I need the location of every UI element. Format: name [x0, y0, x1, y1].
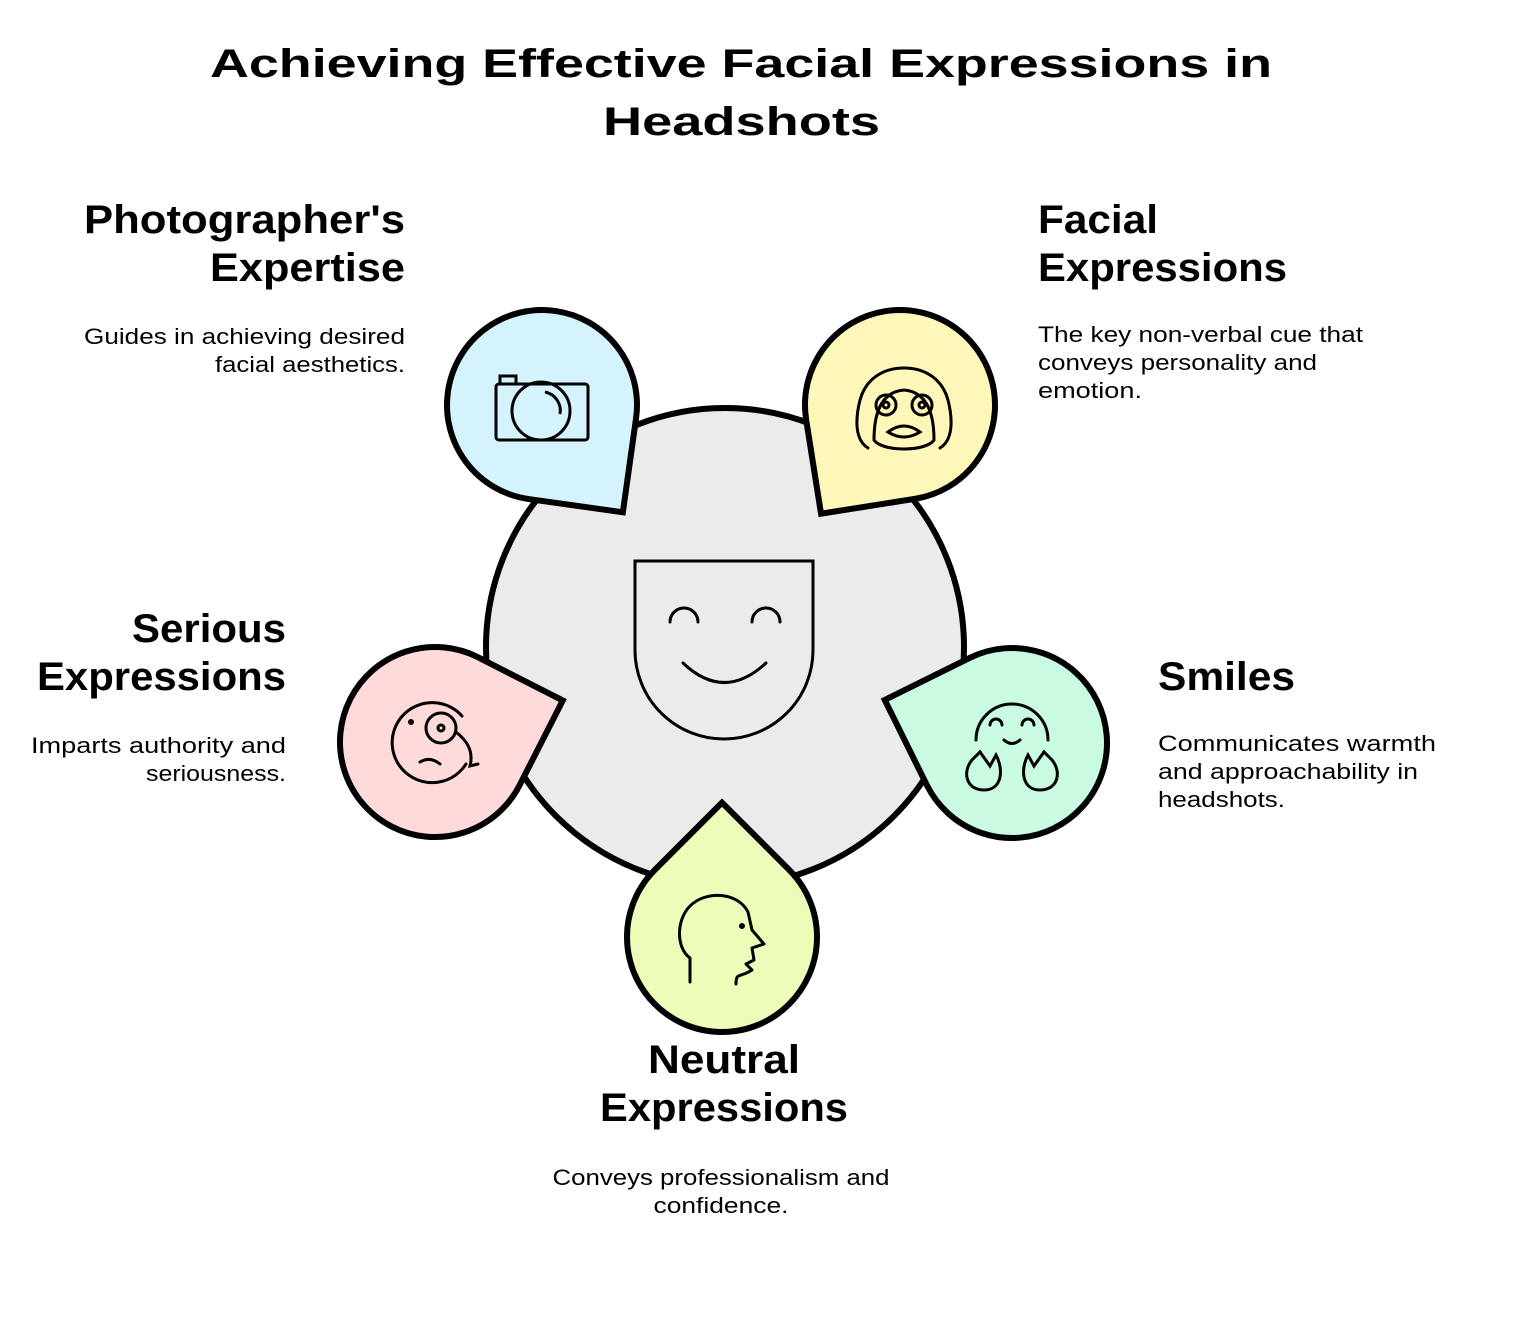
text: neutral expressions: confidence.	[654, 1193, 788, 1218]
text: photographer's expertise: Guides in achieving desired	[84, 324, 405, 349]
text: smiles: Smiles	[1158, 655, 1295, 699]
text: photographer's expertise: Expertise	[210, 246, 405, 290]
text: smiles: headshots.	[1158, 787, 1285, 812]
text: photographer's expertise: facial aesthetics.	[215, 352, 405, 377]
pin: neutral expressions	[588, 803, 856, 1071]
pin: serious expressions	[307, 614, 563, 870]
text: facial expressions: Expressions	[1038, 246, 1287, 290]
icon: head profile	[680, 895, 764, 984]
central circle	[486, 408, 964, 886]
text: facial expressions: The key non-verbal cue that	[1038, 322, 1363, 347]
icon: serious face with monocle	[392, 703, 478, 783]
text: smiles: and approachability in	[1158, 759, 1418, 784]
text: neutral expressions: Expressions	[600, 1086, 848, 1130]
text: serious expressions	[31, 607, 286, 786]
icon: smiling mask	[635, 561, 813, 739]
pin: photographer's expertise (camera)	[435, 298, 649, 512]
text: photographer's expertise	[84, 198, 405, 377]
text: facial expressions: conveys personality and	[1038, 350, 1317, 375]
icon: happy face with hands	[967, 704, 1057, 790]
text: neutral expressions	[552, 1038, 890, 1218]
text: neutral expressions: Conveys professionalism and	[552, 1165, 890, 1190]
pin: smiles	[885, 616, 1139, 870]
text: serious expressions: seriousness.	[146, 761, 286, 786]
icon: expressive face	[857, 368, 951, 449]
text: serious expressions: Serious	[132, 607, 286, 651]
title: Headshots	[603, 100, 880, 144]
title	[210, 42, 1272, 144]
text: smiles	[1158, 655, 1436, 812]
text: serious expressions: Expressions	[37, 655, 286, 699]
text: smiles: Communicates warmth	[1158, 731, 1436, 756]
text: facial expressions: emotion.	[1038, 378, 1142, 403]
text: photographer's expertise: Photographer's	[84, 198, 405, 242]
pin: facial expressions	[791, 296, 1009, 514]
text: serious expressions: Imparts authority and	[31, 733, 286, 758]
text: facial expressions: Facial	[1038, 198, 1158, 242]
title: Achieving Effective Facial Expressions in	[210, 42, 1272, 86]
text: neutral expressions: Neutral	[648, 1038, 800, 1082]
text: facial expressions	[1038, 198, 1363, 403]
icon: camera	[496, 376, 588, 440]
